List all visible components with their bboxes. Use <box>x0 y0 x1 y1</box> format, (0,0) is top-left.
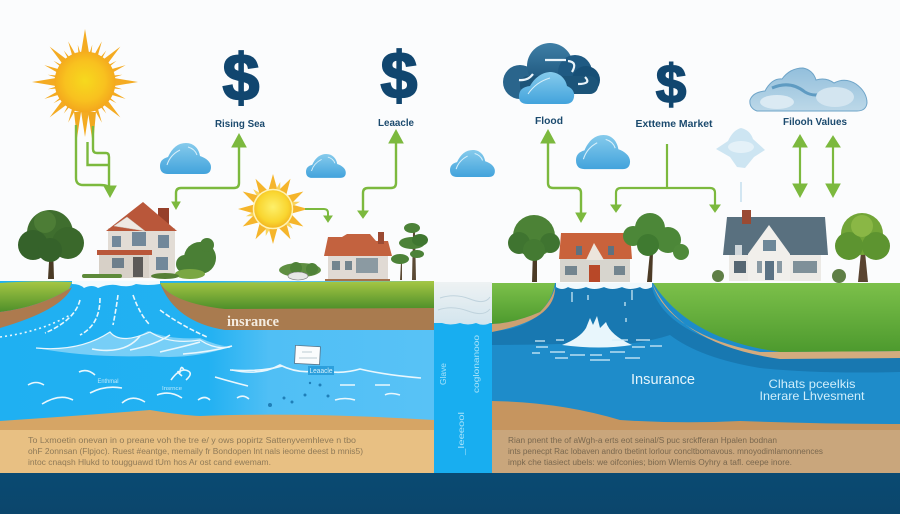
small fish specks <box>268 382 330 407</box>
house: low left <box>324 232 392 282</box>
sandy seabed <box>492 401 900 430</box>
icon: dark storm clouds <box>503 43 600 104</box>
label: Filooh Values: Filooh Values <box>783 116 847 128</box>
bush <box>151 238 216 279</box>
text block: Rian pnent the of aWgh-a erts eot seinal/S puc srckfferan Hpalen bodnan <box>508 436 777 445</box>
right grass bank <box>653 283 900 352</box>
arrows: double headed <box>793 135 840 197</box>
rotated column text: _Ieeeool <box>457 412 466 456</box>
right sand bank <box>652 283 900 359</box>
house: two storey left <box>82 202 177 278</box>
label: investment note: Clhats pceelkis <box>768 377 856 391</box>
icon: dollar sign: $ <box>223 40 259 114</box>
text block <box>508 436 823 467</box>
foam <box>72 281 160 288</box>
left soil bank <box>0 287 72 328</box>
text block: ohF 2onnsan (Flpjoc). Ruest #eantge, memaily fr Bondopen lnt nals ieome deest b mnis5) <box>28 447 363 456</box>
text block background <box>0 430 434 473</box>
label: Extteme Market: Extteme Market <box>636 118 713 130</box>
arrow: Leaacle to house <box>358 130 403 218</box>
text block <box>28 436 363 467</box>
icon: pale watercolor cloud <box>750 68 867 111</box>
label: insrance: insrance <box>227 314 279 330</box>
bushes by slate house <box>712 269 846 283</box>
arrow: Flood to house <box>541 130 586 222</box>
rotated column text: Glave <box>439 362 448 385</box>
tree: left <box>18 210 84 279</box>
icon: dollar sign: $ <box>381 38 417 112</box>
foam <box>556 283 652 289</box>
icon: pale rain cloud <box>716 128 765 202</box>
label: Rising Sea: Rising Sea <box>215 118 265 130</box>
tree: right of flood house <box>623 213 689 282</box>
tree: slim right <box>391 223 428 280</box>
icon: dollar sign: $ <box>656 53 686 115</box>
label: Leaacle: Leaacle <box>378 117 414 129</box>
arrow: Market to houses <box>611 144 720 212</box>
tree: by flood house <box>508 215 560 282</box>
text block background <box>492 430 900 473</box>
house: slate roof house <box>723 210 828 281</box>
text block: ints penecpt Rac lobaven andro tbetint lorlour concltbomavous. mnoyodimlamonnences <box>508 447 823 456</box>
footer band <box>0 473 900 514</box>
icon: small sun <box>238 174 308 244</box>
deep channel <box>492 288 900 372</box>
house: flood house <box>559 233 632 282</box>
rotated column text: coglonanooo <box>472 334 481 393</box>
arrow: small sun to house <box>305 209 332 222</box>
small note card <box>295 345 334 375</box>
label: Flood: Flood <box>535 115 563 127</box>
icon: large sun <box>32 29 138 145</box>
panel: centre column <box>434 282 492 473</box>
text block: To Lxmoetin onevan in o preane voh the tre e/ y ows popirtz Sattenyvemhleve n tbo <box>28 436 357 445</box>
icon: small cloud <box>306 154 346 178</box>
arrows: sun to first house <box>76 125 116 197</box>
icon: small cloud <box>160 143 211 174</box>
label: investment note: Inerare Lhvesment <box>760 389 865 403</box>
label: investment note <box>760 377 865 403</box>
right soil bank <box>160 283 434 330</box>
label: small water text: Insrnce <box>162 386 182 392</box>
small note card: Leaacle <box>310 368 333 375</box>
panel: right cross-section <box>492 283 900 473</box>
sandy seabed <box>0 410 434 430</box>
icon: small cloud <box>576 135 630 169</box>
right grass bank <box>160 281 434 309</box>
bushes and rocks <box>279 262 321 280</box>
arrow: Rising Sea to house <box>172 134 246 209</box>
text block: impk che tiasiect ubels: we oifconies; biom Wlemis Oyhry a tafl. ceepe inore. <box>508 458 792 467</box>
wave lines <box>0 295 421 404</box>
water splash <box>532 290 662 360</box>
left grass bank <box>492 283 555 324</box>
panel: left cross-section <box>0 281 434 473</box>
left grass bank <box>0 281 72 312</box>
left sand bank <box>492 287 555 332</box>
text block: intoc cnaqsh Hlukd to tougguawd tUm hos Ar ost cand ewemam. <box>28 458 271 467</box>
icon: small cloud <box>450 150 495 177</box>
label: small water text: Enthmal <box>98 379 118 385</box>
tree: far right <box>835 213 890 282</box>
label: Insurance: Insurance <box>631 371 695 388</box>
wave crest shapes <box>36 331 230 357</box>
